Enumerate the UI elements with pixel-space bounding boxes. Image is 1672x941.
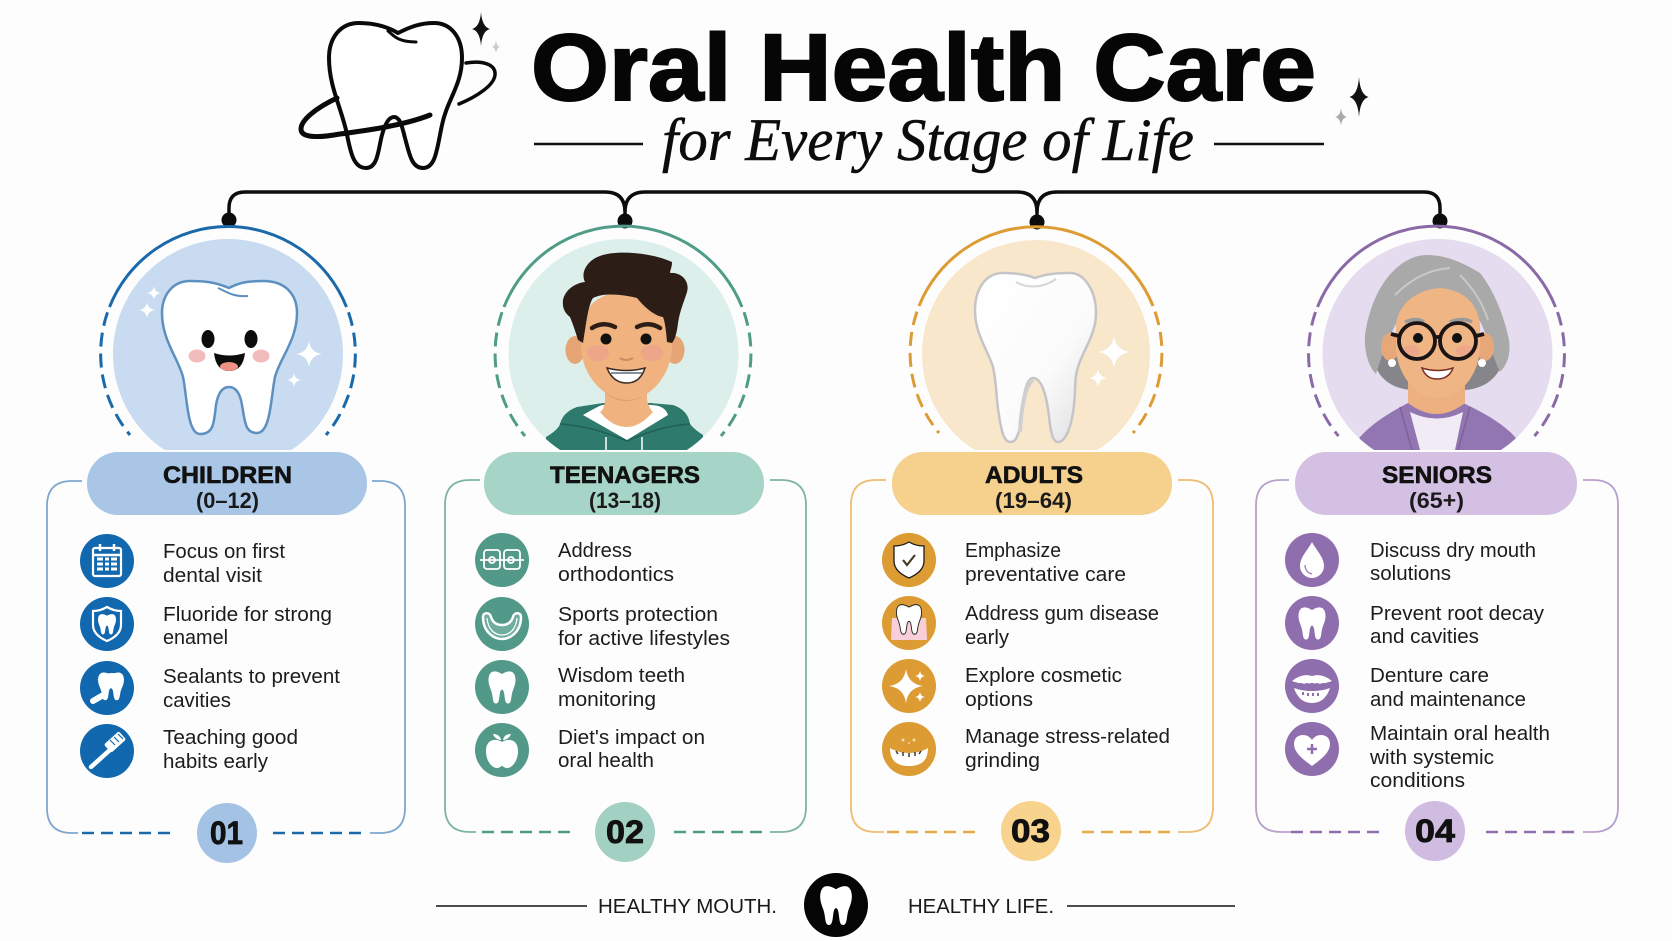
number badge 01 [197, 803, 257, 863]
text: diet [558, 727, 705, 772]
text: diet: oral health [558, 750, 654, 772]
portrait ring: teenagers [495, 226, 751, 436]
text: first dental visit: Focus on first [163, 541, 285, 563]
footer tagline: HEALTHY MOUTH. [598, 896, 777, 918]
text: good habits: habits early [163, 751, 268, 773]
heading pill: teenagers: TEENAGERS [550, 462, 700, 489]
text: denture care [1370, 665, 1526, 711]
text: gum disease [965, 603, 1159, 649]
portrait: teen with braces [508, 239, 738, 469]
text: wisdom teeth: monitoring [558, 689, 656, 711]
icon: wisdom tooth [475, 660, 529, 714]
card outline [851, 480, 1213, 832]
text: systemic conditions [1369, 723, 1550, 792]
portrait ring: children [101, 227, 355, 435]
icon: shield tooth [80, 597, 134, 651]
panel: children [47, 227, 405, 863]
text: systemic conditions: with systemic [1369, 747, 1494, 769]
heading pill: adults: ADULTS [985, 462, 1083, 489]
icon: toothbrush [80, 724, 134, 778]
text: sealants: cavities [163, 690, 231, 712]
number badge 02 [595, 802, 655, 862]
text: root decay: Prevent root decay [1370, 603, 1544, 625]
text: denture care: Denture care [1370, 665, 1489, 687]
heading pill: teenagers [484, 452, 764, 515]
heading pill: adults: (19–64) [995, 488, 1072, 513]
icon: mouth guard [475, 597, 529, 651]
icon: apple [475, 723, 529, 777]
portrait ring: seniors [1309, 226, 1564, 436]
text: preventative care [965, 540, 1126, 586]
text: sports protection: Sports protection [558, 604, 718, 626]
text: fluoride: enamel [163, 627, 228, 649]
text: fluoride [163, 604, 332, 649]
number badge 01: 01 [210, 815, 243, 851]
text: grinding [965, 726, 1170, 772]
heading pill: children [87, 452, 367, 515]
icon: calendar [80, 534, 134, 588]
text: dry mouth [1370, 540, 1536, 585]
number badge 03: 03 [1011, 813, 1050, 849]
title: Oral Health Care [531, 15, 1316, 121]
text: first dental visit: dental visit [163, 565, 262, 587]
text: good habits [163, 727, 298, 773]
panel: adults [851, 227, 1213, 861]
portrait ring: adults [910, 227, 1162, 433]
connector tree [222, 192, 1448, 230]
text: diet: Diet's impact on [558, 727, 705, 749]
number badge 02: 02 [606, 814, 644, 850]
heading pill: seniors: (65+) [1409, 488, 1464, 513]
icon: sparkles [882, 659, 936, 713]
text: systemic conditions: conditions [1370, 770, 1465, 792]
text: grinding: Manage stress-related [965, 726, 1170, 748]
heading pill: adults [892, 452, 1172, 515]
text: dry mouth: Discuss dry mouth [1370, 540, 1536, 562]
circle background [922, 240, 1150, 468]
text: wisdom teeth [558, 665, 685, 711]
icon: tooth [1285, 596, 1339, 650]
circle background [113, 239, 343, 469]
text: wisdom teeth: Wisdom teeth [558, 665, 685, 687]
text: systemic conditions: Maintain oral health [1370, 723, 1550, 745]
portrait: grandmother with glasses [1322, 239, 1552, 469]
text: sealants [163, 666, 340, 712]
icon: realistic tooth [975, 273, 1130, 442]
footer tagline [436, 873, 1235, 937]
text: orthodontics [558, 540, 674, 586]
panel: seniors [1256, 226, 1618, 861]
footer tagline: HEALTHY LIFE. [908, 896, 1054, 918]
text: sealants: Sealants to prevent [163, 666, 340, 688]
icon: grinding [882, 722, 936, 776]
icon: shield check [882, 533, 936, 587]
text: orthodontics: Address [558, 540, 632, 562]
text: preventative care: preventative care [965, 564, 1126, 586]
icon: tooth and gum [882, 596, 936, 650]
heading pill: seniors [1295, 452, 1577, 515]
text: cosmetic options [965, 665, 1122, 711]
text: gum disease: early [965, 627, 1009, 649]
subtitle: for Every Stage of Life [662, 107, 1194, 173]
heading pill: children: CHILDREN [163, 462, 292, 489]
text: gum disease: Address gum disease [965, 603, 1159, 625]
text: dry mouth: solutions [1370, 563, 1451, 585]
number badge 04 [1405, 801, 1465, 861]
text: cosmetic options: options [965, 689, 1033, 711]
icon: sealant tooth [80, 661, 134, 715]
text: root decay [1370, 603, 1544, 648]
heading pill: seniors: SENIORS [1382, 462, 1492, 489]
card outline [445, 480, 806, 832]
text: preventative care: Emphasize [965, 540, 1061, 562]
icon: smiling tooth [139, 281, 322, 434]
text: cosmetic options: Explore cosmetic [965, 665, 1122, 687]
icon: water drop [1285, 533, 1339, 587]
card outline [47, 481, 405, 833]
card outline [1256, 480, 1618, 832]
text: sports protection: for active lifestyles [558, 628, 730, 650]
text: fluoride: Fluoride for strong [163, 604, 332, 626]
number badge 03 [1001, 801, 1061, 861]
text: first dental visit [163, 541, 285, 587]
text: denture care: and maintenance [1370, 689, 1526, 711]
heading pill: children: (0–12) [196, 488, 259, 513]
icon: braces [475, 533, 529, 587]
panel: teenagers [445, 226, 806, 862]
logo: tooth with orbit [301, 23, 495, 168]
text: root decay: and cavities [1370, 626, 1479, 648]
icon: heart plus [1285, 722, 1339, 776]
text: orthodontics: orthodontics [558, 564, 674, 586]
number badge 04: 04 [1415, 813, 1455, 849]
sparkles beside logo [472, 12, 1368, 126]
heading pill: teenagers: (13–18) [589, 488, 661, 513]
text: sports protection [558, 604, 730, 650]
text: good habits: Teaching good [163, 727, 298, 749]
icon: denture [1285, 659, 1339, 713]
icon: footer tooth [804, 873, 868, 937]
text: grinding: grinding [965, 750, 1040, 772]
